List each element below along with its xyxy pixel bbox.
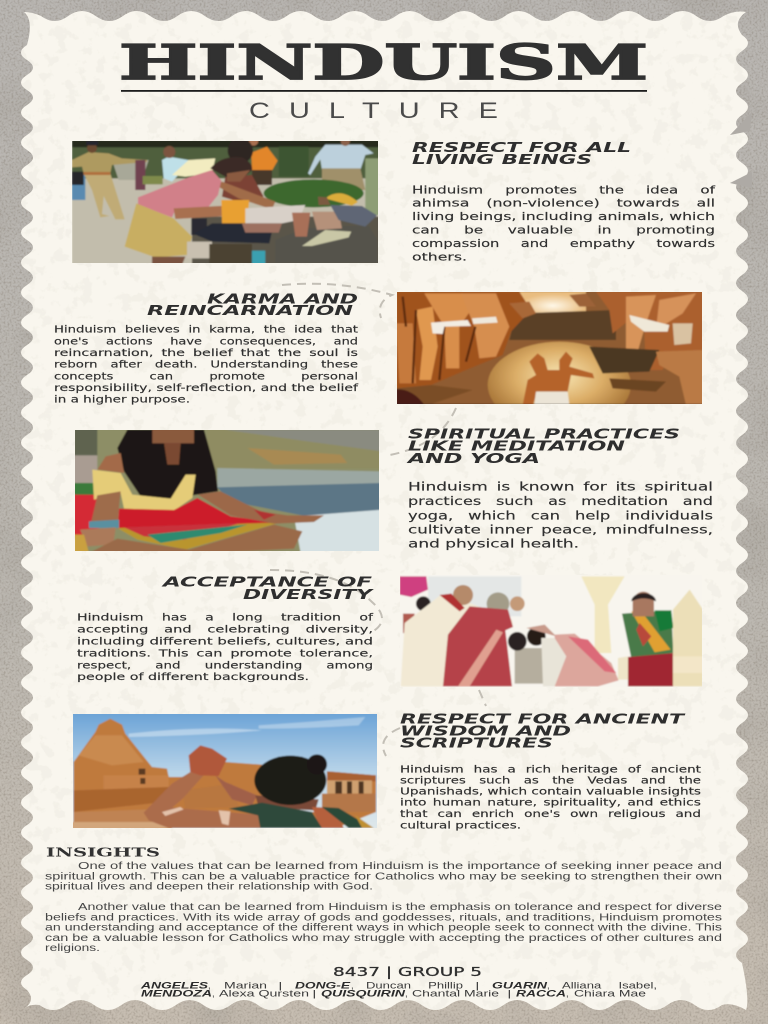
text: insights second paragraph: religions. (45, 943, 100, 954)
text: respect for ancient wisdom: scriptures such as the Vedas and the (400, 776, 701, 787)
group members: , (208, 980, 211, 991)
group members: Marian (224, 980, 267, 991)
heading: spiritual practices (406, 428, 680, 467)
text: respect for ancient wisdom (400, 764, 701, 831)
text: spiritual practices: practices such as meditation and (408, 494, 713, 508)
subtitle: CULTURE (249, 98, 517, 123)
group members: | (508, 989, 511, 1000)
heading: respect for ancient wisdom: SCRIPTURES (400, 737, 553, 752)
heading: respect for all living beings: LIVING BEINGS (412, 153, 592, 168)
photo: temple and worshipper (72, 712, 380, 830)
text: insights first paragraph (45, 861, 722, 893)
group members: , (405, 989, 408, 1000)
group label: 8437 | GROUP 5 (333, 965, 482, 979)
text: acceptance of diversity: accepting and celebrating diversity, (77, 625, 373, 636)
text: respect for ancient wisdom: cultural practices. (400, 820, 521, 831)
text: respect for all living beings: compassion and empathy towards (412, 237, 715, 250)
text: respect for all living beings (412, 183, 717, 263)
text: spiritual practices: Hinduism is known for its spiritual (408, 480, 713, 494)
heading: respect for ancient wisdom (400, 712, 686, 752)
text: respect for ancient wisdom: Upanishads, which contain valuable insights (400, 787, 701, 798)
text: spiritual practices (408, 480, 713, 551)
group members: ANGELES (140, 980, 209, 991)
group members: , (212, 989, 215, 1000)
text: karma and reincarnation: responsibility, self-reflection, and the belief (54, 383, 359, 394)
group members: QUISQUIRIN (321, 989, 407, 1000)
text: karma and reincarnation: reborn after death. Understanding these (54, 359, 358, 370)
text: respect for all living beings: ahimsa (non-violence) towards all (412, 197, 715, 210)
heading: respect for all living beings: RESPECT FOR ALL (412, 141, 631, 156)
group members: Chiara Mae (574, 989, 646, 1000)
photo: karma painting (397, 292, 702, 404)
heading: acceptance of diversity (161, 576, 375, 603)
text: spiritual practices: cultivate inner peace, mindfulness, (408, 522, 713, 536)
text: respect for all living beings: Hinduism promotes the idea of (412, 183, 717, 196)
photo: meditation by waterfall (74, 428, 382, 553)
title: HINDUISM (119, 35, 648, 91)
text: acceptance of diversity: traditions. This can promote tolerance, (77, 649, 373, 660)
heading: karma and reincarnation: REINCARNATION (147, 304, 353, 319)
group members: , (547, 980, 550, 991)
text: karma and reincarnation (54, 325, 359, 405)
text: acceptance of diversity: people of different backgrounds. (77, 672, 309, 683)
text: spiritual practices: and physical health. (408, 537, 579, 551)
dashed connector arcs (270, 284, 486, 756)
group members: | (279, 980, 282, 991)
heading: acceptance of diversity: ACCEPTANCE OF (161, 576, 372, 591)
text: acceptance of diversity (77, 613, 374, 683)
group members: RACCA (516, 989, 566, 1000)
group members: Alliana Isabel, (562, 980, 657, 991)
text: karma and reincarnation: reincarnation, the belief that the soul is (54, 348, 358, 359)
group members: Duncan Phillip (366, 980, 463, 991)
heading: respect for all living beings (412, 141, 631, 168)
text: insights second paragraph: an understanding and acceptance of the different ways in which people seek to connect with the divine. This (45, 923, 722, 934)
heading: spiritual practices: LIKE MEDITATION (408, 440, 625, 455)
text: insights second paragraph: beliefs and practices. With its wide array of gods and goddesses, rituals, and traditions, Hinduism promotes (45, 912, 722, 923)
text: insights first paragraph: spiritual growth. This can be a valuable practice for Catholics who may be seeking to strengthen their own (45, 871, 722, 882)
text: insights first paragraph: One of the values that can be learned from Hinduism is the importance of seeking inner peace and (78, 861, 722, 872)
text: acceptance of diversity: respect, and understanding among (77, 661, 373, 672)
group members (140, 980, 657, 1000)
group members: GUARIN (492, 980, 549, 991)
heading: insights: INSIGHTS (46, 845, 160, 860)
heading: karma and reincarnation: KARMA AND (207, 292, 358, 308)
group members: , (351, 980, 354, 991)
text: karma and reincarnation: in a higher purpose. (54, 394, 190, 405)
text: spiritual practices: yoga, which can help individuals (408, 509, 713, 523)
group members: MENDOZA (141, 989, 212, 1000)
text: karma and reincarnation: concepts can promote personal (54, 371, 358, 382)
photo: ceremony (398, 573, 706, 689)
group members: , (566, 989, 569, 1000)
group members: Alexa Qursten (219, 989, 309, 1000)
title rule (121, 90, 647, 92)
text: respect for ancient wisdom: Hinduism has a rich heritage of ancient (400, 764, 701, 775)
text: karma and reincarnation: one's actions have consequences, and (54, 336, 358, 347)
text: respect for ancient wisdom: that can enrich one's own religious and (400, 809, 701, 820)
text: insights second paragraph: Another value that can be learned from Hinduism is the emphasis on tolerance and respect for diverse (78, 902, 723, 913)
group members: DONG-E (295, 980, 351, 991)
text: insights second paragraph: can be a valuable lesson for Catholics who may struggle with accepting the practices of other cultures and (45, 933, 722, 944)
photo: helping elderly man (72, 136, 380, 265)
group members: Chantal Marie (412, 989, 499, 1000)
group members: | (313, 989, 316, 1000)
heading: karma and reincarnation (147, 292, 358, 319)
text: karma and reincarnation: Hinduism believes in karma, the idea that (54, 325, 358, 336)
group members: | (476, 980, 479, 991)
heading: respect for ancient wisdom: WISDOM AND (400, 725, 571, 740)
text: respect for ancient wisdom: into human nature, spirituality, and ethics (400, 798, 701, 809)
text: acceptance of diversity: including different beliefs, cultures, and (77, 637, 373, 648)
text: respect for all living beings: can be valuable in promoting (412, 223, 715, 236)
heading: acceptance of diversity: DIVERSITY (243, 588, 375, 603)
text: acceptance of diversity: Hinduism has a long tradition of (77, 613, 374, 624)
text: respect for all living beings: living beings, including animals, which (412, 210, 715, 223)
heading: spiritual practices: SPIRITUAL PRACTICES (408, 428, 680, 442)
text: insights second paragraph (45, 902, 723, 954)
heading: respect for ancient wisdom: RESPECT FOR ANCIENT (400, 712, 686, 727)
heading: spiritual practices: AND YOGA (406, 452, 540, 467)
text: insights first paragraph: spiritual lives and deepen their relationship with God. (45, 882, 373, 893)
text: respect for all living beings: others. (412, 250, 467, 263)
